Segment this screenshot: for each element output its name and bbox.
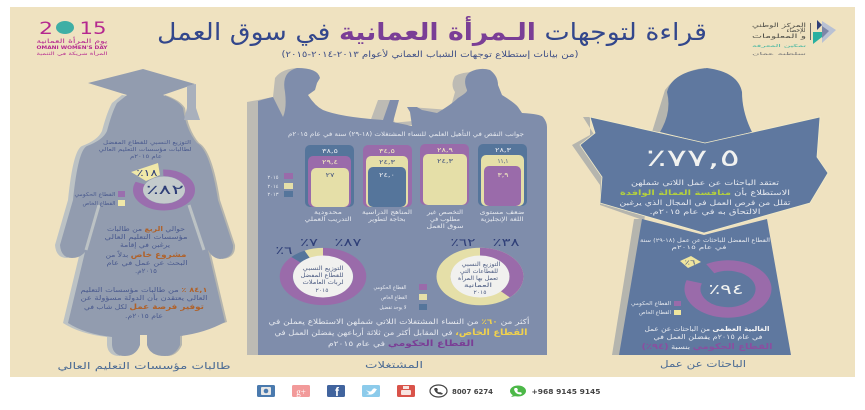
legend: القطاع الخاص xyxy=(639,310,671,316)
panel label: المشتغلات xyxy=(365,360,423,371)
panel: job seekers xyxy=(572,68,828,370)
logo: National Centre for Statistics and Information: و المعلومات xyxy=(752,34,807,40)
figure shadow xyxy=(55,95,195,356)
sleeve folds xyxy=(86,205,204,250)
legend: sectors xyxy=(374,284,427,311)
icon: google plus: g+ xyxy=(296,387,306,397)
donut chart: 94 percent: ٩٤٪ xyxy=(708,282,744,298)
panel label: طالبات مؤسسات التعليم العالي xyxy=(58,361,230,372)
box: English: ١١,١ xyxy=(498,158,508,165)
figures shadow xyxy=(247,68,480,355)
text: government preference: الغالبية العظمى من الباحثات عن عمل xyxy=(644,325,770,333)
text: private project: ٢٠١٥م. xyxy=(135,267,158,275)
text: state responsibility: ٨٤,١ ٪ من طالبات مؤسسات التعليم xyxy=(80,286,208,294)
chart heading: جوانب النقص في التأهيل العلمي للنساء المشتغلات (١٨-٢٩) سنة في عام ٢٠١٥م xyxy=(288,129,524,138)
heading: sector preference: التوزيع النسبي للقطاع المفضل xyxy=(103,140,191,146)
donut chart: employment sectors xyxy=(444,236,520,301)
graduate figure silhouette xyxy=(60,69,233,356)
donut chart: preferred sector xyxy=(276,236,362,301)
icon: phone xyxy=(430,385,447,397)
reader silhouette head xyxy=(660,68,752,143)
donut chart: employment sectors: العمانية xyxy=(464,283,493,289)
icon: google plus xyxy=(292,385,310,397)
legend xyxy=(74,191,125,207)
logo: National Centre for Statistics and Information xyxy=(752,20,836,56)
legend: years: ٢٠١٤ xyxy=(268,184,279,190)
text: private project: يرغبن في إقامة xyxy=(120,241,170,249)
mortarboard tassel xyxy=(184,84,200,120)
legend: sectors: القطاع الحكومي xyxy=(374,285,406,291)
logo: Omani Women's Day 2015 xyxy=(36,19,109,57)
box: practical training: ٣٨,٥ xyxy=(322,148,338,155)
legend: القطاع الخاص xyxy=(82,201,116,207)
donut chart: employment sectors: ٦٢٪ xyxy=(450,236,476,249)
box: specialization: سوق العمل xyxy=(426,223,464,230)
logo: National Centre for Statistics and Information: المركز الوطني xyxy=(752,22,807,29)
chart: qualification gaps xyxy=(304,144,527,230)
text: foreign labour: الالتحاق به في عام ٢٠١٥م. xyxy=(650,208,761,216)
donut chart: employment sectors: ٢٠١٥ xyxy=(474,290,486,296)
donut chart: 82 percent xyxy=(131,163,190,207)
text: state responsibility: العالي يعتقدن بأن الدولة مسؤولة عن xyxy=(80,293,208,302)
legend: years xyxy=(268,173,293,198)
donut chart: 82 percent: ١٨٪ xyxy=(136,168,158,179)
donut chart: preferred sector: ٦٪ xyxy=(276,244,293,257)
text: government preference xyxy=(642,325,773,351)
box: English: ٢٨,٣ xyxy=(495,147,512,154)
subtitle: (من بيانات إستطلاع توجهات الشباب العماني لأعوام ٢٠١٣-٢٠١٤-٢٠١٥) xyxy=(282,49,578,60)
donut chart: preferred sector: ٧٪ xyxy=(300,236,318,249)
text: sector summary: أكثر من ٦٠٪ من النساء المشتغلات اللاتي شملهن الاستطلاع يعملن في xyxy=(268,316,530,326)
legend: القطاع الحكومي xyxy=(631,301,671,307)
donut chart: employment sectors: للقطاعات التي xyxy=(460,269,498,275)
icon: whatsapp xyxy=(510,386,526,397)
skirt xyxy=(619,219,791,355)
box: practical training: التدريب العملي xyxy=(304,216,352,223)
legend: sectors: القطاع الخاص xyxy=(381,295,407,301)
box: curricula: ٣٤,٥ xyxy=(379,148,395,155)
donut chart: preferred sector: ٢٠١٥ xyxy=(316,288,328,294)
panel: women in higher education xyxy=(55,69,235,372)
panel: employed women xyxy=(247,68,547,371)
box: specialization: ٢٨,٩ xyxy=(437,147,454,154)
box: English: اللغة الإنجليزية xyxy=(480,216,524,223)
text: sector summary: القطاع الخاص، في المقابل أكثر من ثلاثة أرباعهن يفضلن العمل في xyxy=(274,327,528,338)
donut chart: employment sectors: تعمل بها المرأة xyxy=(458,274,499,282)
logo: Omani Women's Day 2015: 2 xyxy=(39,19,53,39)
box: specialization: مطلوب في xyxy=(430,216,460,223)
logo: Omani Women's Day 2015: المرأة شريكة في التنمية xyxy=(36,50,108,57)
logo: Omani Women's Day 2015: 15 xyxy=(80,19,106,39)
figure right shadow xyxy=(152,95,235,356)
box: specialization: التخصص غير xyxy=(426,209,463,216)
text: foreign labour: الاستطلاع بأن منافسة العمالة الوافدة xyxy=(620,187,790,197)
donut chart: employment sectors: ٣٨٪ xyxy=(492,236,520,249)
text: private project: البحث عن عمل في عام xyxy=(106,259,188,267)
text: government preference: القطاع الحكومي بنسبة (٩٤٪) xyxy=(642,342,773,351)
text: foreign labour: تعتقد الباحثات عن عمل اللاتي شملهن xyxy=(631,179,779,187)
legend xyxy=(631,301,681,316)
legend: القطاع الحكومي xyxy=(74,192,116,198)
heading: preferred sector xyxy=(640,238,771,251)
logo: National Centre for Statistics and Information: سلطنة عمان xyxy=(752,51,808,56)
box: English xyxy=(478,144,527,223)
box: curricula xyxy=(362,145,412,223)
icon: twitter xyxy=(362,385,380,397)
big number: ٧٧,٥٪ xyxy=(646,144,740,172)
donut chart: employment sectors: التوزيع النسبي xyxy=(462,262,501,268)
box: specialization: ٢٤,٣ xyxy=(437,158,454,165)
donut chart: 82 percent: ٨٢٪ xyxy=(146,183,184,198)
donut chart: 94 percent: ٦٪ xyxy=(684,258,696,266)
text: foreign labour: تقلل من فرص العمل في المجال الذي يرغبن xyxy=(620,199,791,207)
legend: sectors: لا يوجد تفضيل xyxy=(380,305,407,311)
box: curricula: ٢٤,٣ xyxy=(379,159,396,166)
text: government preference: في عام ٢٠١٥م يفضلن العمل في xyxy=(654,333,762,341)
legend: years: ٢٠١٣ xyxy=(268,192,279,198)
box: English: ضعف مستوى xyxy=(480,209,524,216)
donut chart: preferred sector: ٨٧٪ xyxy=(334,236,362,249)
heading: sector preference: لطالبات مؤسسات التعليم العالي xyxy=(98,147,192,153)
text: state responsibility: توفير فرصة عمل لكل شاب في xyxy=(84,302,204,311)
logo: Omani Women's Day 2015: يوم المرأة العمانية xyxy=(36,36,108,45)
panel label: الباحثات عن عمل xyxy=(660,359,746,370)
icon: instagram xyxy=(257,385,275,397)
text: sector summary xyxy=(268,316,530,349)
text: private project: مشروع خاص بدلاً من xyxy=(105,250,187,259)
text: private project xyxy=(104,225,188,275)
box: curricula: ٢٤,٠ xyxy=(379,172,395,179)
text: foreign labour xyxy=(620,179,791,216)
box: curricula: بحاجة لتطوير xyxy=(367,216,406,223)
logo: National Centre for Statistics and Information: تمكين المعرفة xyxy=(752,43,806,48)
donut chart: 94 percent xyxy=(680,256,776,321)
heading: sector preference: عام ٢٠١٥م xyxy=(130,154,162,160)
box: practical training: محدودية xyxy=(314,209,342,216)
box: practical training: ٢٩,٤ xyxy=(322,159,338,166)
box: specialization xyxy=(420,144,469,230)
heading: sector preference xyxy=(98,140,192,160)
text: sector summary: القطاع الحكومي في عام ٢٠١٥م xyxy=(328,338,474,349)
heading: preferred sector: في عام ٢٠١٥م xyxy=(672,245,727,251)
heading: preferred sector: القطاع المفضل للباحثات عن عمل (١٨-٢٩) سنة xyxy=(640,238,771,244)
logo: Omani Women's Day 2015: OMANI WOMEN'S DAY xyxy=(36,45,109,51)
text: private project: مؤسسات التعليم العالي xyxy=(104,233,188,241)
donut chart: preferred sector: لربات العاملات xyxy=(302,280,344,286)
box: English: ٣,٩ xyxy=(498,172,509,179)
seated figures silhouette xyxy=(258,68,547,355)
legend: years: ٢٠١٥ xyxy=(268,175,279,181)
open book xyxy=(580,117,828,233)
box: curricula: المناهج الدراسية xyxy=(362,209,412,216)
donut chart: preferred sector: للقطاع المفضل xyxy=(300,273,344,279)
figure shadow xyxy=(572,68,705,355)
text: state responsibility xyxy=(80,286,208,320)
whatsapp number: +968 9145 9145 xyxy=(532,388,601,396)
icon: facebook xyxy=(327,385,345,399)
footer: contact bar xyxy=(257,385,601,399)
box: practical training xyxy=(304,145,354,223)
phone number: 8007 6274 xyxy=(452,388,493,396)
icon: facebook: f xyxy=(335,385,340,399)
donut chart: preferred sector: التوزيع النسبي xyxy=(302,266,344,272)
box: practical training: ٢٧ xyxy=(326,172,335,179)
text: state responsibility: عام ٢٠١٥م. xyxy=(125,312,163,320)
text: private project: حوالي الربع من طالبات xyxy=(107,225,185,233)
title: قراءة لتوجهات الـمرأة العمانية في سوق العمل xyxy=(157,16,707,46)
logo: National Centre for Statistics and Information: للإحصاء xyxy=(786,28,806,34)
icon: youtube xyxy=(397,385,415,397)
